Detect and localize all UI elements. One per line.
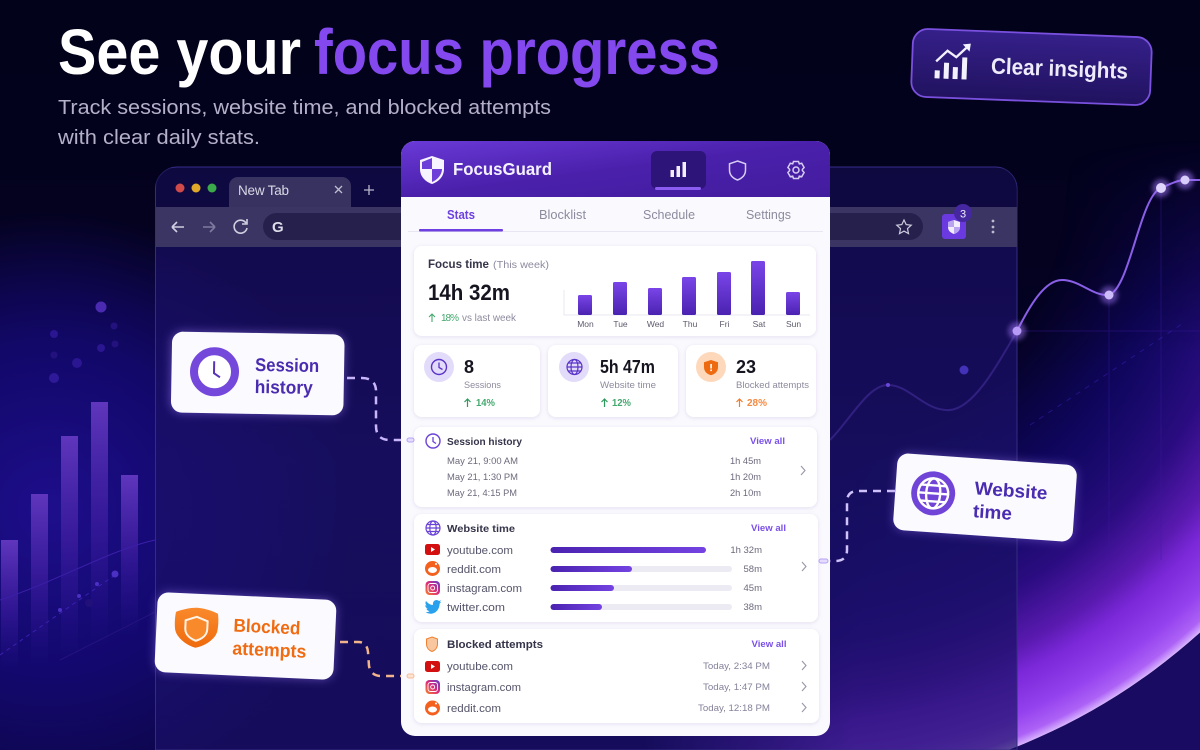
card: blocked attempts	[414, 629, 819, 723]
extension icon with badge	[942, 204, 972, 239]
row: youtube: youtube.com	[447, 545, 513, 557]
bar chart: weekly focus time: Wed	[647, 319, 664, 329]
glowing planet arc	[673, 166, 1200, 750]
browser window	[156, 167, 1017, 750]
subtitle	[57, 96, 551, 149]
row: reddit: 58m	[744, 564, 762, 575]
icon: shield	[174, 607, 219, 649]
row: instagram	[426, 581, 762, 595]
callout: website time	[893, 453, 1078, 542]
bar chart: weekly focus time: Fri	[720, 319, 730, 329]
card: session history	[414, 427, 817, 507]
badge: clear insights: Clear insights	[991, 53, 1128, 84]
icon: growth chart	[934, 42, 971, 80]
badge: clear insights	[911, 28, 1152, 106]
bar chart: weekly focus time: Tue	[613, 319, 628, 329]
window controls	[176, 184, 216, 192]
title: See your	[58, 16, 301, 88]
card: focus time: Focus time	[428, 259, 489, 271]
address bar: G	[272, 219, 284, 236]
tabs: Stats	[447, 208, 475, 222]
tabs: Settings	[746, 208, 791, 222]
row: instagram: instagram.com	[447, 682, 521, 694]
stat card: blocked attempts: Blocked attempts	[736, 380, 809, 391]
stat card: sessions	[414, 345, 540, 417]
tabs	[408, 208, 823, 232]
card: blocked attempts: View all	[752, 639, 786, 650]
bar chart: weekly focus time	[564, 261, 810, 329]
title: focus progress	[314, 16, 720, 88]
bar chart: weekly focus time: Thu	[683, 319, 698, 329]
stat card: website time	[548, 345, 678, 417]
callout: session history: history	[255, 376, 314, 398]
nav: gear	[788, 162, 804, 178]
browser menu dots	[992, 220, 994, 233]
stat card: sessions: Sessions	[464, 380, 501, 391]
trend text: vs last week	[462, 313, 517, 324]
bar chart: weekly focus time: Sat	[753, 319, 766, 329]
card: website time: Website time	[447, 523, 515, 535]
row: twitter	[425, 600, 762, 614]
card: session history: View all	[750, 436, 785, 447]
bar chart: weekly focus time: Sun	[786, 319, 801, 329]
stat card: website time: 12%	[612, 398, 631, 409]
card: session history: 1h 45m	[730, 456, 761, 466]
card: focus time: 14h 32m	[428, 280, 510, 305]
popup header: FocusGuard	[453, 159, 552, 179]
background	[0, 161, 1200, 750]
popup header	[401, 141, 830, 197]
row: twitter: 38m	[744, 602, 762, 613]
callout: session history	[170, 331, 345, 415]
icon: logo shield	[420, 156, 444, 184]
callout: website time: time	[972, 500, 1013, 524]
card: focus time: (This week)	[493, 259, 549, 271]
trend text	[429, 313, 517, 324]
trend text: 18%	[441, 313, 459, 324]
row: instagram: 45m	[744, 583, 762, 594]
card: session history: 2h 10m	[730, 488, 761, 498]
chart nodes	[886, 171, 1194, 387]
popup panel	[401, 141, 830, 736]
tabs: Schedule	[643, 208, 695, 222]
row: youtube	[425, 661, 806, 673]
row: youtube: 1h 32m	[730, 545, 762, 556]
row: reddit	[425, 561, 762, 576]
title	[58, 16, 720, 88]
nav: shield	[730, 161, 746, 180]
background line chart	[830, 180, 1200, 560]
connector: website time	[820, 491, 895, 561]
card: website time: View all	[751, 523, 786, 534]
row: twitter: twitter.com	[447, 602, 505, 614]
background bar chart decoration	[0, 302, 155, 670]
row: instagram: Today, 1:47 PM	[703, 682, 770, 693]
nav: stats selected	[651, 151, 706, 190]
card: session history: May 21, 4:15 PM	[447, 488, 517, 498]
browser tab	[229, 177, 374, 207]
callout: session history: Session	[255, 354, 319, 376]
card: focus time	[414, 246, 816, 336]
connector: session history	[347, 378, 414, 440]
row: youtube	[425, 544, 762, 557]
callout: website time: Website	[974, 477, 1048, 503]
stat card: sessions: 14%	[476, 398, 495, 409]
row: reddit: Today, 12:18 PM	[698, 703, 770, 714]
connector: blocked attempts	[340, 642, 414, 676]
card: blocked attempts: Blocked attempts	[447, 639, 543, 651]
row: instagram	[426, 680, 806, 694]
card: website time	[414, 514, 818, 622]
bar chart: weekly focus time: Mon	[577, 319, 594, 329]
browser title strip	[156, 168, 1017, 207]
subtitle: Track sessions, website time, and blocked attempts	[58, 96, 551, 119]
browser toolbar	[156, 207, 1017, 247]
row: reddit	[425, 700, 806, 716]
card: session history: May 21, 1:30 PM	[447, 472, 518, 482]
icon: globe	[910, 470, 957, 517]
stat card: blocked attempts	[686, 345, 816, 417]
callout: blocked attempts	[154, 592, 337, 680]
row: instagram: instagram.com	[447, 583, 522, 595]
card: session history: Session history	[447, 436, 522, 448]
tabs: Blocklist	[539, 208, 587, 222]
subtitle: with clear daily stats.	[57, 126, 260, 149]
card: session history: 1h 20m	[730, 472, 761, 482]
row: reddit: reddit.com	[447, 564, 501, 576]
card: session history: May 21, 9:00 AM	[447, 456, 518, 466]
stat card: blocked attempts: 23	[736, 357, 756, 377]
extension icon with badge: 3	[960, 208, 966, 220]
address bar	[263, 213, 923, 240]
row: youtube: youtube.com	[447, 661, 513, 673]
callout: blocked attempts: attempts	[232, 637, 307, 662]
nav icons	[172, 219, 247, 233]
stat card: website time: 5h 47m	[600, 357, 655, 377]
row: reddit: reddit.com	[447, 703, 501, 715]
row: youtube: Today, 2:34 PM	[703, 661, 770, 672]
callout: blocked attempts: Blocked	[233, 614, 301, 638]
stat card: website time: Website time	[600, 380, 656, 391]
stat card: sessions: 8	[464, 357, 474, 377]
connector end pills	[407, 438, 828, 678]
icon: clock	[194, 351, 235, 393]
browser tab: New Tab	[238, 183, 289, 198]
stat card: blocked attempts: 28%	[747, 398, 767, 409]
